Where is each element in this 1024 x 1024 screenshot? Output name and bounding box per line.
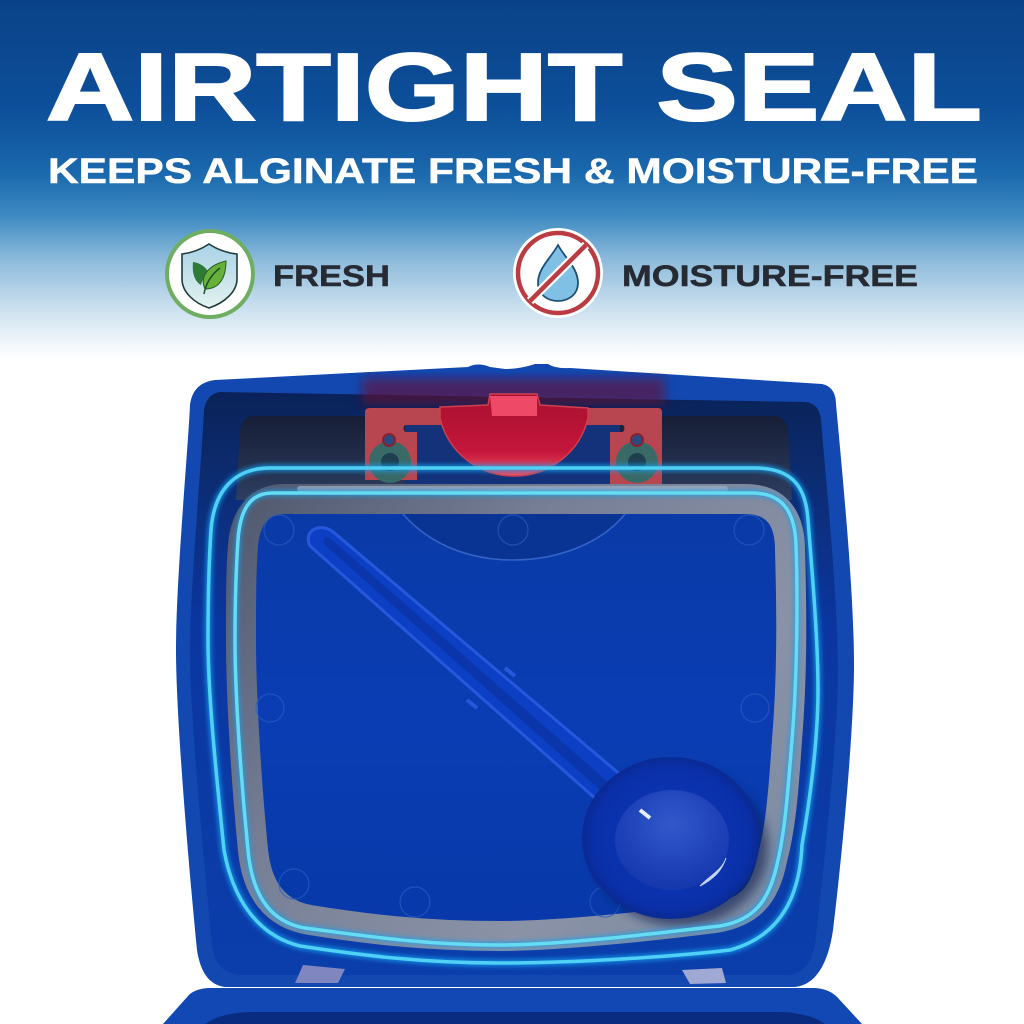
lid inner wall [190,392,838,975]
glowing seal line: inner core [235,493,797,945]
grey rubber gasket with inner tray floor [241,499,791,936]
latch shadow on top wall [362,378,665,405]
badge: moisture-free [513,228,918,318]
latch recess arc on tray [403,514,625,560]
container base rim [163,988,862,1024]
tray detail circles [256,515,769,917]
label: fresh: FRESH [273,260,390,293]
glowing seal line: outer halo [208,468,818,963]
label: moisture-free: MOISTURE-FREE [622,260,918,293]
badge: fresh [167,231,390,317]
screw: left [369,441,411,483]
scoop dome [615,790,729,890]
hinge tabs [295,965,726,984]
screw: right [616,441,658,483]
gasket top highlight [300,486,725,492]
back wall recess [236,416,792,500]
glowing seal line: inner halo [235,493,797,945]
lid outer shell [176,364,854,987]
glowing seal line: outer core [208,468,818,963]
icon: crossed-out water drop [513,228,603,318]
red latch [365,394,662,484]
icon: shield with leaves [167,231,253,317]
blue band behind latch [405,425,620,487]
container lid: open blue case [176,364,854,987]
scoop handle [308,528,622,800]
subtitle: KEEPS ALGINATE FRESH & MOISTURE-FREE [48,152,978,191]
title: AIRTIGHT SEAL [46,34,982,141]
bowl shadow [592,770,768,926]
scoop bowl [582,757,760,919]
header gradient background [0,0,1024,360]
measuring scoop [308,528,768,926]
